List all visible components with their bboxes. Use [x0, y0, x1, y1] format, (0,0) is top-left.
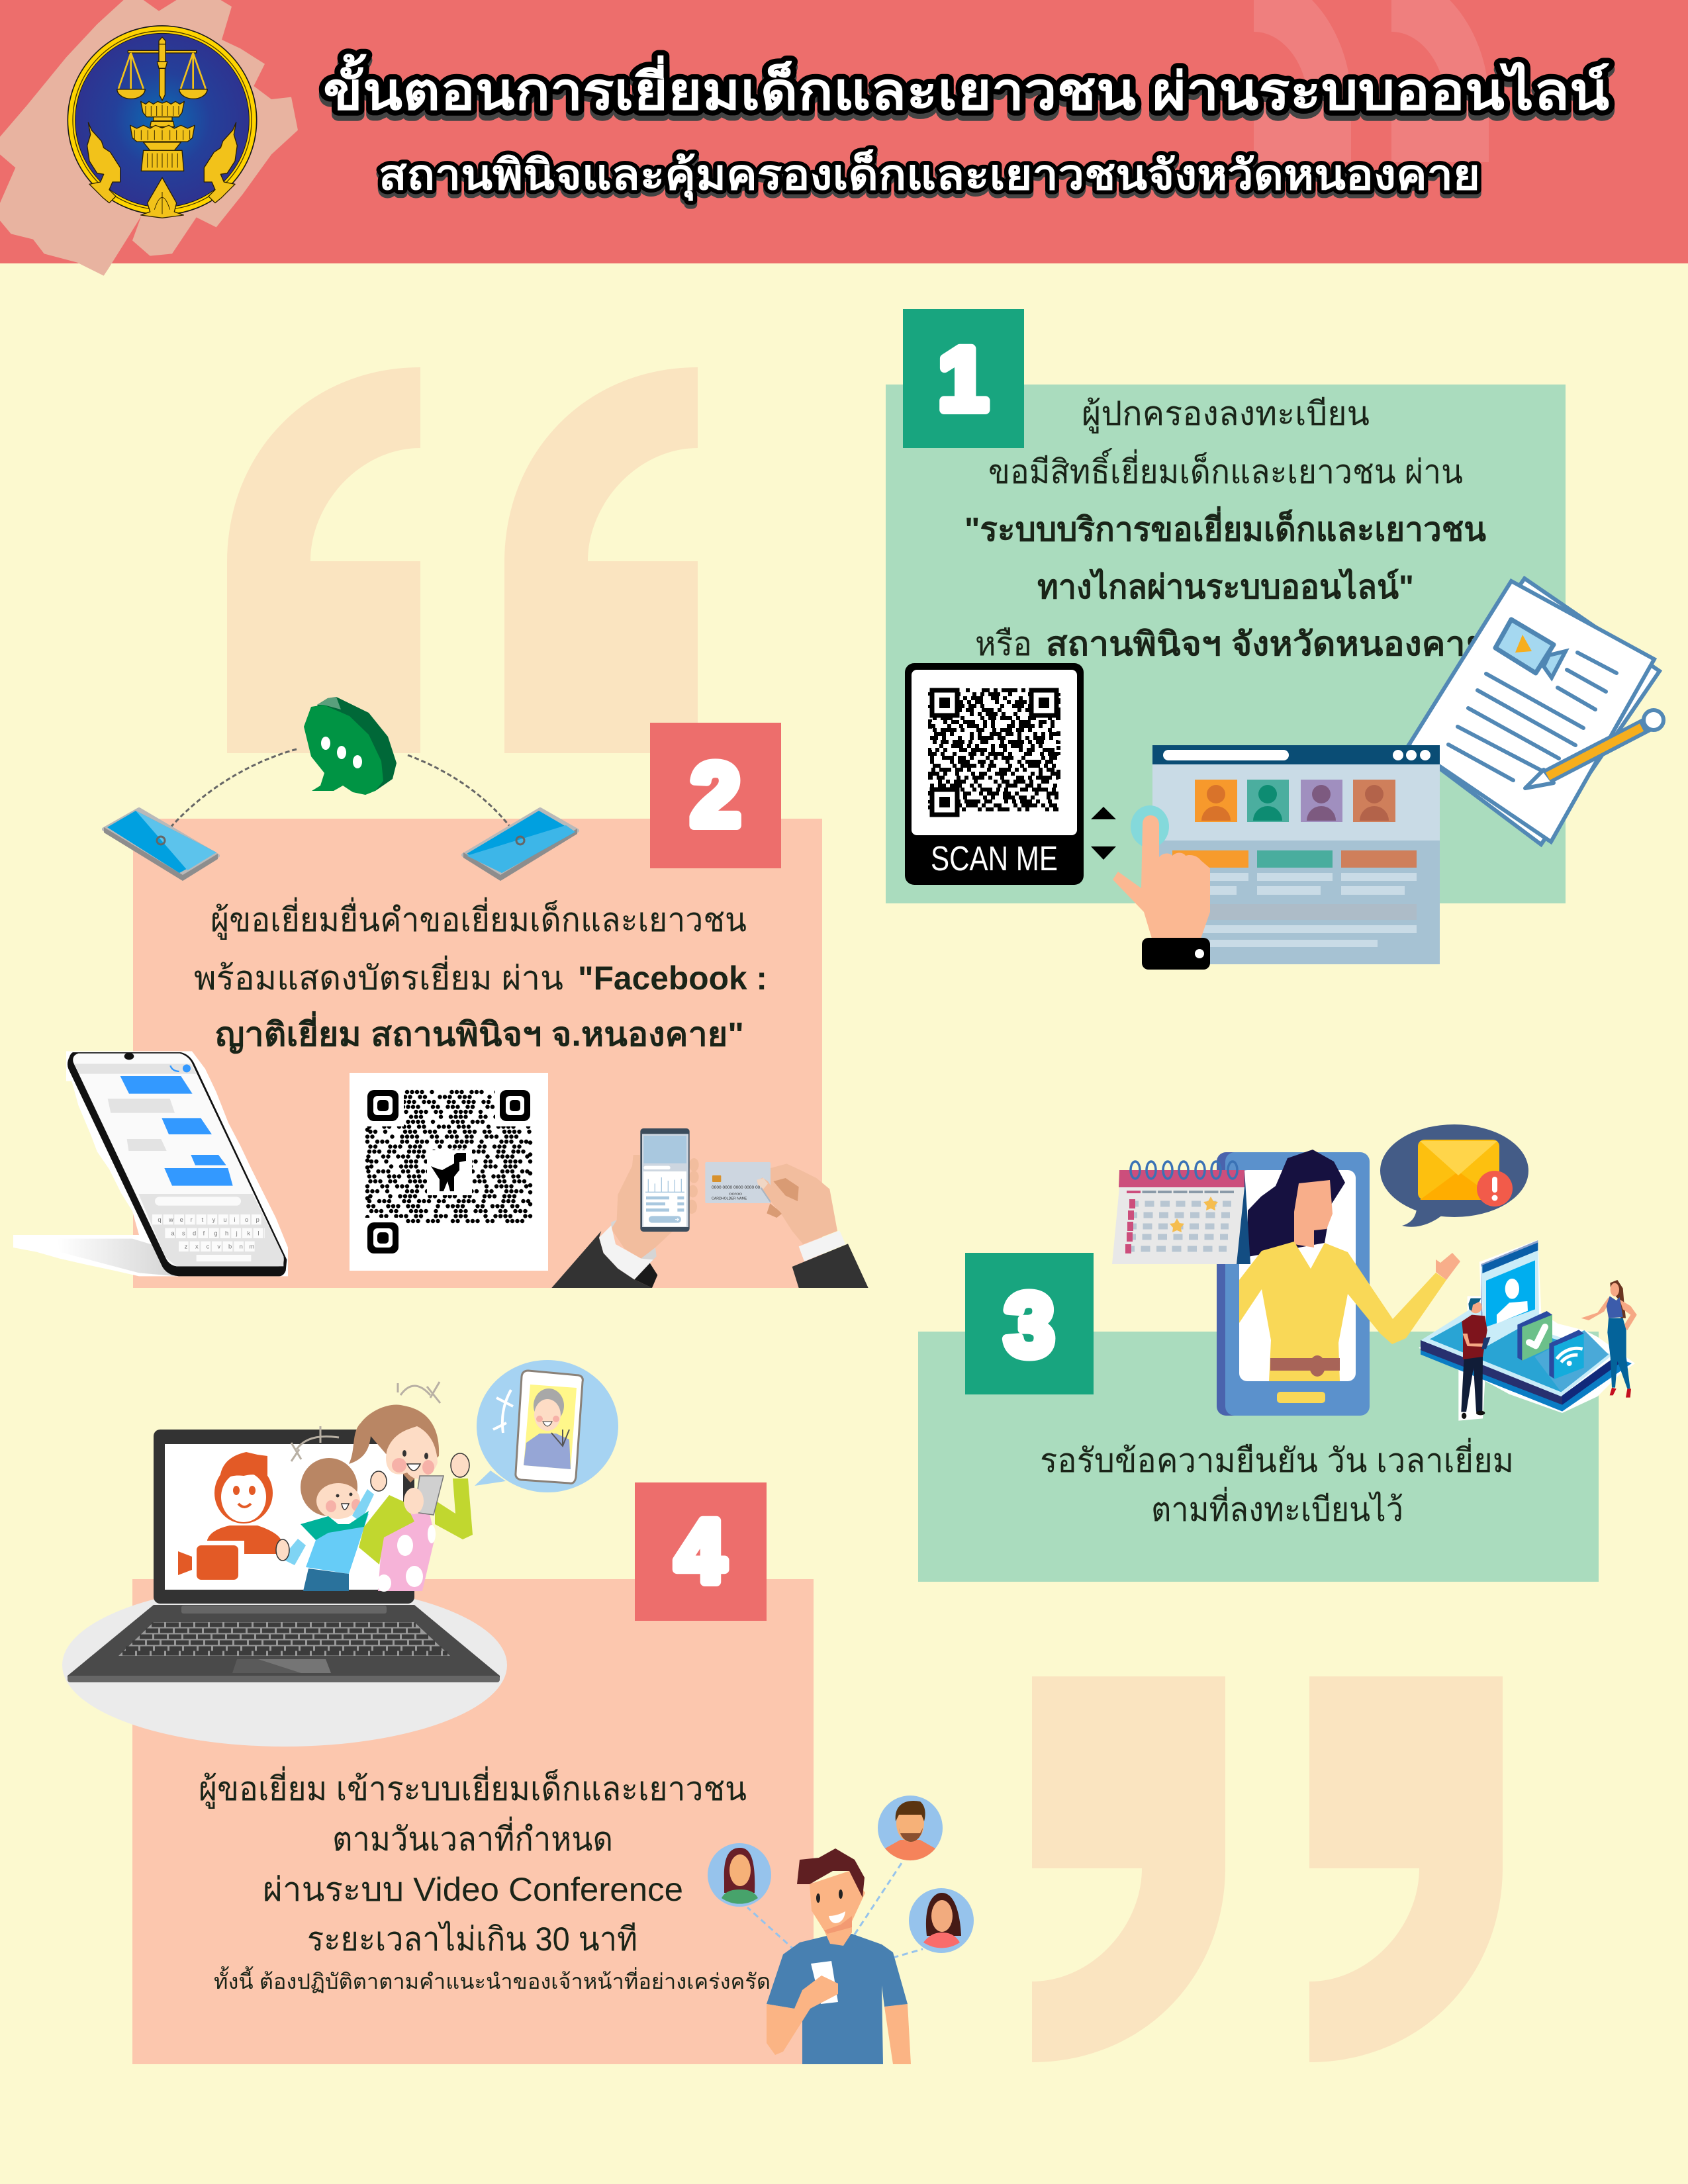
icon: hands holding phone and card: 00/00 — [729, 1193, 743, 1196]
panel 4 text: ผ่านระบบ Video Conference — [263, 1871, 683, 1908]
panel 2: submit request — [13, 697, 868, 1288]
header banner — [0, 0, 1688, 276]
panel 2 text: "Facebook : — [578, 960, 767, 997]
panel 1 text: สถานพินิจฯ จังหวัดหนองคาย — [1046, 625, 1486, 662]
arrows — [1091, 807, 1116, 860]
icon: message speech bubble — [1380, 1124, 1528, 1227]
icon: smartphone messenger: zxcvbnm — [185, 1244, 255, 1250]
icon: dinosaur — [431, 1153, 466, 1191]
header quote decoration — [1254, 0, 1489, 162]
badge 3: 3 — [1005, 1276, 1054, 1375]
avatars — [1195, 780, 1395, 822]
icon: document with pencil — [1409, 578, 1664, 844]
panel 1: register — [886, 309, 1664, 970]
wifi card — [1549, 1330, 1584, 1379]
panel 4 text: ระยะเวลาไม่เกิน 30 นาที — [307, 1921, 637, 1958]
panel 4 text: ผู้ขอเยี่ยม เข้าระบบเยี่ยมเด็กและเยาวชน — [199, 1766, 747, 1809]
QR code: facebook — [350, 1073, 548, 1271]
icon: smartphone messenger: qwertyuiop — [158, 1216, 259, 1223]
mother — [349, 1404, 473, 1592]
panel 4: join video conference — [62, 1360, 974, 2064]
logo emblem — [68, 26, 257, 218]
woman — [1581, 1280, 1637, 1398]
badge 2 — [650, 723, 781, 868]
badge 4 — [635, 1482, 767, 1621]
badge 1 — [903, 309, 1024, 448]
badge 3 — [965, 1253, 1094, 1394]
panel 2 text: ผู้ขอเยี่ยมยื่นคำขอเยี่ยมเด็กและเยาวชน — [211, 897, 747, 940]
panel 3 text: รอรับข้อความยืนยัน วัน เวลาเยี่ยม — [1040, 1438, 1514, 1479]
panel 2 text: พร้อมแสดงบัตรเยี่ยม ผ่าน — [194, 956, 563, 997]
left phone — [104, 809, 218, 881]
QR code: scan me — [905, 663, 1084, 885]
badge 4: 4 — [676, 1502, 725, 1601]
icon: man with phone and contacts — [708, 1796, 974, 2064]
panel 1 text — [964, 395, 1486, 662]
icon: chat bubble with connected phones — [104, 697, 577, 881]
subtitle: สถานพินิจและคุ้มครองเด็กและเยาวชนจังหวัดหนองคาย — [379, 150, 1480, 201]
panel 1 text: ขอมีสิทธิ์เยี่ยมเด็กและเยาวชน ผ่าน — [988, 447, 1463, 490]
speech bubble with grandfather on phone — [475, 1360, 618, 1492]
subtitle: สถานพินิจและคุ้มครองเด็กและเยาวชนจังหวัดหนองคาย — [379, 150, 1480, 201]
icon: smartphone messenger: asdfghjkl — [171, 1230, 259, 1237]
browser window — [1152, 745, 1440, 964]
panel 4 text: ทั้งนี้ ต้องปฏิบัติตาตามคำแนะนำของเจ้าหน้าที่อย่างเคร่งครัด — [214, 1966, 771, 1993]
panel 4 text: ตามวันเวลาที่กำหนด — [332, 1817, 613, 1858]
panel 1 text: ทางไกลผ่านระบบออนไลน์" — [1037, 568, 1414, 606]
panel 1 text: ผู้ปกครองลงทะเบียน — [1082, 395, 1370, 433]
icon: hands holding phone and card — [551, 1128, 868, 1288]
badge 2: 2 — [691, 746, 740, 844]
panel 3 text — [1040, 1438, 1514, 1528]
icon: woman in smartphone — [1217, 1150, 1460, 1416]
title: ขั้นตอนการเยี่ยมเด็กและเยาวชน ผ่านระบบออนไลน์ — [323, 54, 1610, 120]
sparkle marks — [291, 1382, 440, 1461]
badge 1: 1 — [939, 330, 988, 429]
title: ขั้นตอนการเยี่ยมเด็กและเยาวชน ผ่านระบบออนไลน์ — [323, 59, 1610, 126]
icon: hands holding phone and card: 0000 0000 0000 0000 00 — [712, 1185, 761, 1190]
right phone — [463, 809, 577, 881]
icon: pointing hand — [1113, 805, 1210, 970]
title: ขั้นตอนการเยี่ยมเด็กและเยาวชน ผ่านระบบออนไลน์ — [323, 54, 1610, 120]
icon: hands holding phone and card: CARDHOLDER NAME — [712, 1197, 747, 1201]
boy — [276, 1458, 387, 1591]
icon: isometric platform with people — [1419, 1240, 1637, 1421]
contact: right woman — [909, 1888, 974, 1953]
subtitle: สถานพินิจและคุ้มครองเด็กและเยาวชนจังหวัดหนองคาย — [379, 154, 1480, 205]
contact: top man — [878, 1796, 943, 1860]
icon: calendar — [1112, 1161, 1250, 1264]
panel 1 text: "ระบบบริการขอเยี่ยมเด็กและเยาวชน — [964, 506, 1486, 548]
panel 2 text: ญาติเยี่ยม สถานพินิจฯ จ.หนองคาย" — [215, 1011, 744, 1054]
panel 3: wait for confirmation — [918, 1124, 1637, 1582]
icon: laptop video call — [62, 1360, 618, 1747]
profile card — [1481, 1240, 1539, 1348]
background quote mark: opening — [227, 367, 698, 753]
icon: smartphone messenger — [13, 1051, 288, 1276]
check card — [1517, 1311, 1552, 1361]
brush stroke behind logo — [0, 0, 298, 276]
man — [1461, 1298, 1491, 1419]
man figure — [767, 1848, 911, 2064]
panel 2 text — [194, 897, 767, 1054]
panel 1 text: หรือ — [975, 625, 1032, 662]
QR code: scan me: SCAN ME — [931, 840, 1058, 878]
panel 4 text — [199, 1766, 771, 1993]
panel 3 text: ตามที่ลงทะเบียนไว้ — [1151, 1487, 1403, 1528]
contact: left woman — [708, 1843, 771, 1907]
camera icon — [190, 1541, 244, 1586]
man avatar on screen — [178, 1452, 282, 1586]
background quote mark: closing — [1032, 1676, 1503, 2062]
